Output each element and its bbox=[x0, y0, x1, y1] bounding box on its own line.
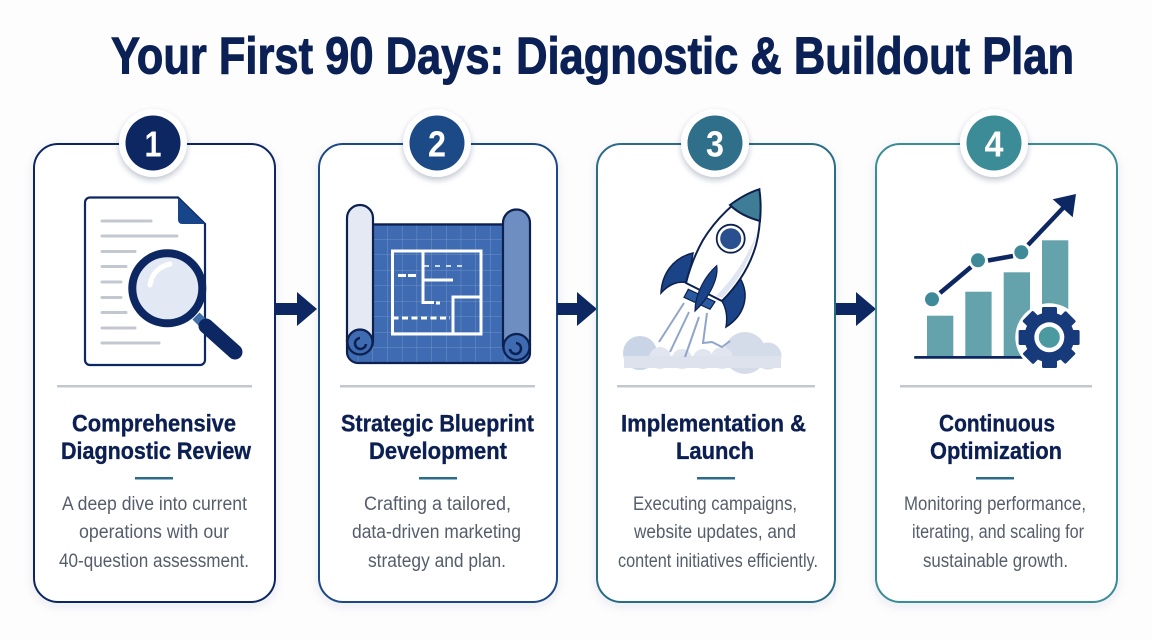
body 4: iterating, and scaling for bbox=[912, 522, 1085, 543]
body 1: A deep dive into current bbox=[62, 494, 248, 515]
accent 4 bbox=[976, 477, 1014, 480]
badge 2: 2 bbox=[428, 124, 446, 164]
badge 4 bbox=[960, 109, 1028, 177]
heading 2 bbox=[341, 410, 534, 465]
panel: step 2 bbox=[319, 109, 557, 602]
panel: step 3 bbox=[597, 109, 835, 602]
arrow 1 to 2 bbox=[275, 292, 317, 326]
accent 3 bbox=[697, 477, 735, 480]
heading 1: Comprehensive bbox=[72, 410, 236, 438]
heading 2: Development bbox=[369, 438, 507, 465]
divider 3 bbox=[617, 385, 815, 388]
divider 2 bbox=[340, 385, 535, 388]
heading 4: Continuous bbox=[939, 410, 1055, 438]
body 1: operations with our bbox=[79, 522, 230, 543]
panel: step 1 bbox=[34, 109, 275, 602]
heading 4: Optimization bbox=[930, 438, 1062, 465]
icon: rocket launch bbox=[623, 189, 782, 374]
heading 2: Strategic Blueprint bbox=[341, 410, 534, 438]
card 2 outline bbox=[319, 144, 557, 602]
divider 4 bbox=[900, 385, 1092, 388]
body 4 bbox=[904, 494, 1086, 572]
heading 4 bbox=[930, 410, 1062, 465]
body 3: content initiatives efficiently. bbox=[618, 551, 818, 572]
card 4 outline bbox=[876, 144, 1117, 602]
badge 4: 4 bbox=[984, 124, 1004, 164]
heading 1: Diagnostic Review bbox=[61, 438, 251, 465]
body 3: website updates, and bbox=[633, 522, 796, 543]
body 3 bbox=[618, 494, 818, 572]
arrow 3 to 4 bbox=[836, 292, 876, 326]
body 1 bbox=[59, 494, 249, 572]
panel: step 4 bbox=[876, 109, 1117, 602]
card 3 outline bbox=[597, 144, 835, 602]
cloud bbox=[623, 332, 782, 374]
gear bbox=[1015, 303, 1083, 371]
heading 1 bbox=[61, 410, 251, 465]
heading 3 bbox=[621, 410, 806, 465]
body 4: sustainable growth. bbox=[923, 551, 1068, 572]
badge 3 bbox=[681, 109, 749, 177]
accent 2 bbox=[419, 477, 457, 480]
icon: document with magnifying glass bbox=[85, 198, 235, 365]
accent 1 bbox=[135, 477, 173, 480]
badge 3: 3 bbox=[706, 124, 724, 164]
body 2: Crafting a tailored, bbox=[364, 494, 511, 515]
badge 2 bbox=[403, 109, 471, 177]
body 3: Executing campaigns, bbox=[633, 494, 797, 515]
body 2: strategy and plan. bbox=[368, 551, 506, 572]
icon: blueprint scroll bbox=[347, 205, 530, 363]
body 4: Monitoring performance, bbox=[904, 494, 1086, 515]
card 1 outline bbox=[34, 144, 275, 602]
body 1: 40-question assessment. bbox=[59, 551, 249, 572]
badge 1: 1 bbox=[144, 124, 162, 164]
arrow 2 to 3 bbox=[557, 292, 597, 326]
badge 1 bbox=[119, 109, 187, 177]
divider 1 bbox=[57, 385, 252, 388]
icon: growth chart with gear bbox=[914, 194, 1083, 371]
heading 3: Implementation & bbox=[621, 410, 806, 438]
body 2 bbox=[352, 494, 521, 572]
body 2: data-driven marketing bbox=[352, 522, 521, 543]
heading 3: Launch bbox=[676, 438, 754, 465]
